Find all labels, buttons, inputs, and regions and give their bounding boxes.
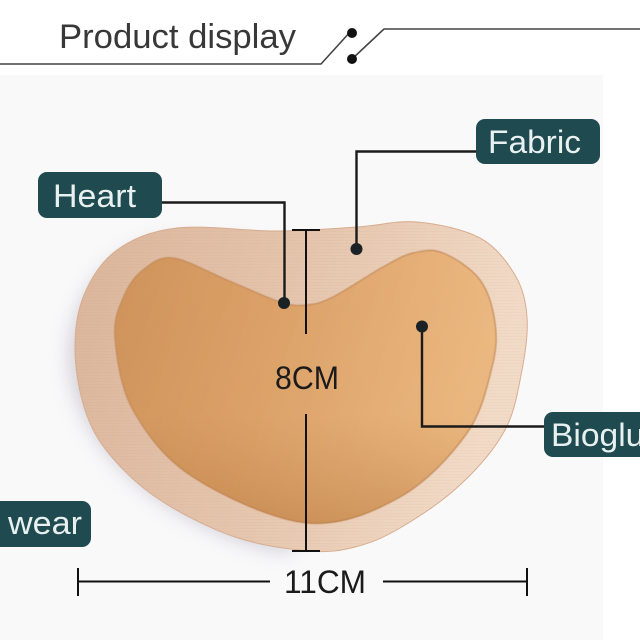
bioglue leader line bbox=[422, 327, 544, 426]
dimension: height 8CM bbox=[275, 230, 339, 551]
label: fabric bbox=[350, 119, 600, 255]
dimension: width 11CM: 11CM bbox=[284, 564, 366, 600]
pad fabric weave bbox=[75, 222, 527, 552]
fabric leader line bbox=[356, 152, 476, 249]
dimension: width 11CM bbox=[78, 564, 527, 600]
label: bioglue bbox=[416, 320, 640, 457]
product: silicone pad bbox=[69, 222, 527, 553]
heading: product display: Product display bbox=[59, 18, 296, 56]
heading rule with switch icon bbox=[0, 28, 640, 64]
pad fabric border bbox=[75, 222, 527, 552]
label: fabric: Fabric bbox=[488, 124, 581, 160]
label: wear bbox=[0, 501, 91, 547]
label: heart bbox=[38, 172, 290, 309]
pad gel lower shading bbox=[115, 250, 496, 523]
label: heart: Heart bbox=[53, 178, 136, 214]
pad gel centre bbox=[115, 250, 496, 523]
dimension: height 8CM: 8CM bbox=[275, 360, 339, 396]
heading: product display bbox=[0, 18, 640, 64]
label: wear: wear bbox=[7, 505, 82, 541]
pad shadow bbox=[69, 240, 294, 553]
heart leader line bbox=[162, 202, 284, 303]
